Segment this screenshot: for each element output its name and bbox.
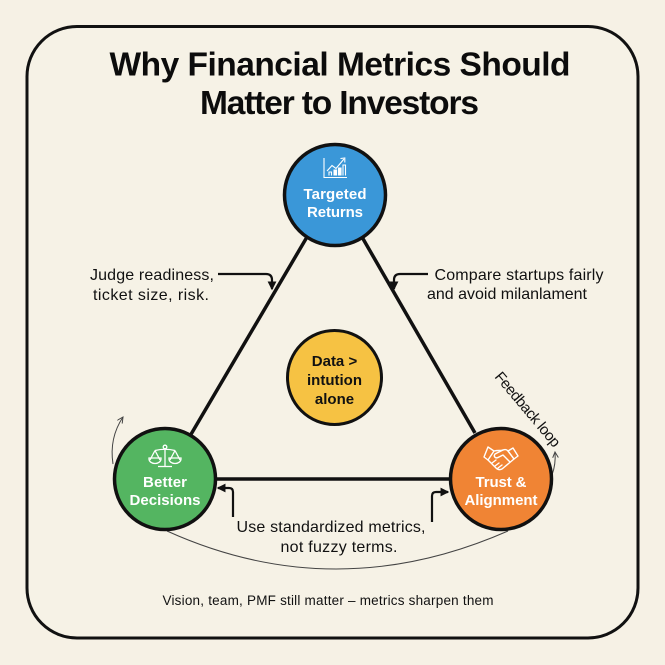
icon: handshake — [484, 447, 518, 470]
label: Targeted — [304, 186, 366, 203]
icon: growth chart — [324, 158, 347, 178]
annotation: judge readiness: Judge readiness, — [90, 267, 214, 284]
node: Better Decisions — [114, 428, 216, 530]
annotation: compare startups — [394, 267, 604, 303]
annotation: judge readiness: ticket size, risk. — [93, 287, 209, 304]
feedback loop arrow: right — [552, 452, 555, 475]
node: Better Decisions: Decisions — [130, 492, 200, 509]
title — [110, 46, 570, 122]
node: Data > intuition: Data > — [312, 353, 357, 370]
arrow — [394, 274, 428, 289]
annotation: standardized metrics — [236, 519, 426, 556]
node: Data > intuition: alone — [315, 391, 354, 408]
label: Better — [143, 474, 187, 491]
annotation: compare startups: Compare startups fairly — [434, 267, 604, 284]
node: Data > intuition — [288, 330, 382, 424]
triangle connector lines — [190, 237, 475, 479]
feedback loop arc: bottom — [167, 531, 508, 569]
annotation: judge readiness — [90, 267, 272, 304]
arrow — [218, 274, 272, 289]
label: Trust & — [476, 474, 527, 491]
annotation: standardized metrics: not fuzzy terms. — [280, 539, 398, 556]
node: Data > intuition: intution — [307, 372, 362, 389]
footer note: Vision, team, PMF still matter – metrics sharpen them — [162, 593, 494, 608]
node: Targeted Returns — [284, 144, 386, 246]
feedback loop label: Feedback loop — [491, 369, 564, 451]
title: Matter to Investors — [200, 85, 479, 122]
icon: scales — [149, 445, 181, 466]
node: Trust & Alignment: Alignment — [464, 492, 538, 509]
arrow: to Trust & Alignment — [432, 492, 448, 522]
title: Why Financial Metrics Should — [110, 46, 570, 84]
node: Targeted Returns: Returns — [307, 204, 363, 221]
annotation: compare startups: and avoid milanlament — [427, 286, 588, 303]
arrow: to Better Decisions — [218, 488, 233, 517]
annotation: standardized metrics: Use standardized metrics, — [236, 519, 426, 536]
feedback loop arrow: left — [112, 417, 123, 464]
node: Trust & Alignment — [450, 428, 552, 530]
